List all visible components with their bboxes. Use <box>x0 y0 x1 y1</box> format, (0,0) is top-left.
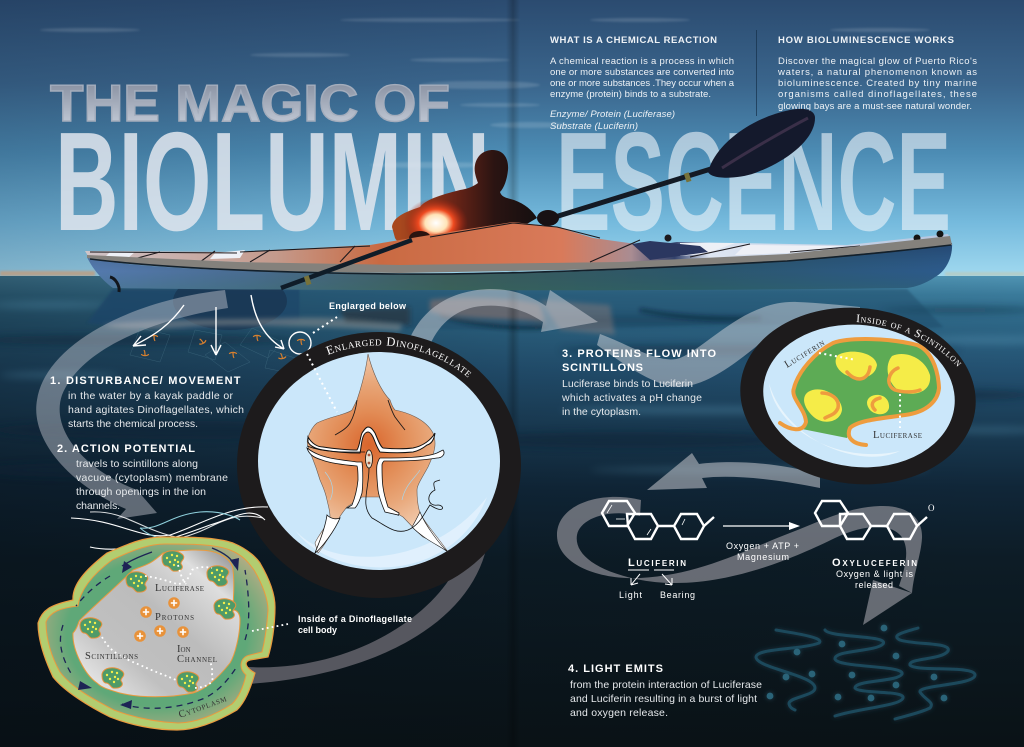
step 3 text: Luciferase binds to Luciferin <box>562 378 693 390</box>
panel: cell body diagram: Cytoplasm <box>177 693 229 721</box>
panel: cell body diagram <box>38 537 288 730</box>
arrow: flow to scintillon <box>410 289 860 387</box>
panel: cell body diagram: Scintillons <box>85 651 138 662</box>
title: bioluminescence: BIOLUMIN <box>55 103 490 260</box>
arrow: cell to enlarged dinoflagellate <box>248 540 488 684</box>
chemical formula: oxyluciferin: O <box>928 503 935 513</box>
lower girdle and flagella strips <box>307 448 363 508</box>
step 1 text <box>50 375 244 430</box>
cytoplasm flow arrows <box>60 548 249 708</box>
step 3 text: in the cytoplasm. <box>562 406 641 418</box>
text block: what is a chemical reaction: Substrate (Luciferin) <box>550 121 638 132</box>
cell body label: cell body <box>298 625 337 635</box>
text block: what is a chemical reaction: one or more substances are converted into <box>550 67 734 78</box>
step 2 text: 2. ACTION POTENTIAL <box>57 443 195 455</box>
step 1 text: in the water by a kayak paddle or <box>68 390 234 402</box>
text block: how bioluminescence works <box>777 35 977 112</box>
cell interior <box>73 550 240 697</box>
panel: inside of a scintillon: Luciferin <box>783 337 827 371</box>
wavy channel lines <box>71 507 268 549</box>
cell labels: Luciferase <box>155 583 204 594</box>
highlight circle and enlarged callout: Englarged below <box>329 301 407 311</box>
ring label: Enlarged Dinoflagellate <box>325 337 472 378</box>
reaction arrow <box>723 522 800 562</box>
step 2 text: through openings in the ion <box>76 486 206 498</box>
text block: what is a chemical reaction: Enzyme/ Protein (Luciferase) <box>550 109 675 120</box>
step 2 text: travels to scintillons along <box>76 458 198 470</box>
panel: cell body diagram: Channel <box>177 654 217 665</box>
upper girdle <box>308 427 435 453</box>
chemical formula: oxyluciferin: Oxyluceferin <box>832 557 917 569</box>
chemical formula: luciferin: Light <box>619 590 642 600</box>
step 3 text: SCINTILLONS <box>562 362 643 374</box>
inner scintillons <box>804 352 930 422</box>
tips <box>315 515 340 553</box>
step 3 text <box>561 348 716 418</box>
squiggles: emitted light <box>756 625 975 719</box>
kayak with paddler <box>85 109 952 292</box>
step 4 text: 4. LIGHT EMITS <box>568 663 663 675</box>
disturbance arrows <box>133 295 284 355</box>
chemical formula: luciferin: Bearing <box>660 590 695 600</box>
step 3 text: 3. PROTEINS FLOW INTO <box>562 348 716 360</box>
page crease <box>506 0 520 747</box>
paddler <box>392 150 537 248</box>
dinoflagellate body <box>307 354 448 553</box>
step 2 text: channels. <box>76 500 120 512</box>
panel: cell body diagram: Protons <box>155 612 194 623</box>
step 4 text: from the protein interaction of Luciferase <box>570 679 762 691</box>
text block: what is a chemical reaction: A chemical reaction is a process in which <box>550 56 734 67</box>
step 4 text: and oxygen release. <box>570 707 668 719</box>
text block: how bioluminescence works: waters, a natural phenomenon known as <box>777 67 977 78</box>
arrow: chemical reaction flow <box>557 497 922 625</box>
kayak hull <box>87 243 952 290</box>
deck rigging <box>90 223 860 262</box>
chemical formula: luciferin <box>602 501 714 600</box>
text block: what is a chemical reaction <box>550 35 735 132</box>
dotted leader over ring <box>307 354 337 412</box>
deck highlights <box>105 243 845 259</box>
text block: how bioluminescence works: Discover the magical glow of Puerto Rico's <box>778 56 977 67</box>
text block: what is a chemical reaction: enzyme (protein) binds to a substrate. <box>550 89 711 100</box>
step 3 text: which activates a pH change <box>561 392 702 404</box>
title: the magic of: THE MAGIC OF <box>50 75 450 133</box>
chemical formula: luciferin: Luciferin <box>628 557 686 569</box>
step 1 text: starts the chemical process. <box>68 418 198 430</box>
small dinoflagellates in the water <box>130 328 304 372</box>
scintillon membrane <box>793 339 939 438</box>
step 1 text: 1. DISTURBANCE/ MOVEMENT <box>50 375 241 387</box>
step 4 text <box>568 663 762 719</box>
panel: inside of a scintillon <box>740 308 976 484</box>
dotted leaders <box>819 353 900 428</box>
dotted leaders in cell <box>102 565 288 688</box>
text block: what is a chemical reaction: one or more substances .They occur when a <box>550 78 735 89</box>
text block: how bioluminescence works: HOW BIOLUMINESCENCE WORKS <box>778 35 954 46</box>
chemical formula: oxyluciferin: released <box>855 580 893 590</box>
text block: what is a chemical reaction: WHAT IS A CHEMICAL REACTION <box>550 35 717 46</box>
step 1 text: hand agitates Dinoflagellates, which <box>68 404 244 416</box>
panel: cell body diagram: Ion <box>177 644 191 655</box>
text block: how bioluminescence works: bioluminescence. Created by tiny marine <box>778 78 977 89</box>
paddle <box>281 109 815 288</box>
chemical formula: oxyluciferin: Oxygen & light is <box>836 569 914 579</box>
ring label: Inside of a Scintillon <box>856 314 962 366</box>
panel: inside of a scintillon: Luciferase <box>873 430 922 441</box>
scintillons in cell <box>80 551 236 692</box>
reaction arrow: Magnesium <box>737 552 789 562</box>
step 4 text: and Luciferin resulting in a burst of light <box>570 693 757 705</box>
step 2 text: vacuoe (cytoplasm) membrane <box>76 472 228 484</box>
step 2 text <box>57 443 228 512</box>
highlight circle and enlarged callout <box>289 301 407 354</box>
kayak reflection <box>87 289 300 329</box>
text block: how bioluminescence works: organisms called dinoflagellates, these <box>778 89 977 100</box>
text block: how bioluminescence works: glowing bays are a must-see natural wonder. <box>778 101 972 112</box>
reaction arrow: Oxygen + ATP + <box>726 541 799 551</box>
cell body label: Inside of a Dinoflagellate <box>298 614 412 624</box>
protons <box>134 597 189 642</box>
kayak deck <box>85 222 952 267</box>
chemical formula: oxyluciferin <box>815 501 935 590</box>
arrow: out of scintillon <box>647 453 820 490</box>
panel: enlarged dinoflagellate <box>237 332 521 598</box>
arrow: disturbance flow <box>36 290 228 519</box>
